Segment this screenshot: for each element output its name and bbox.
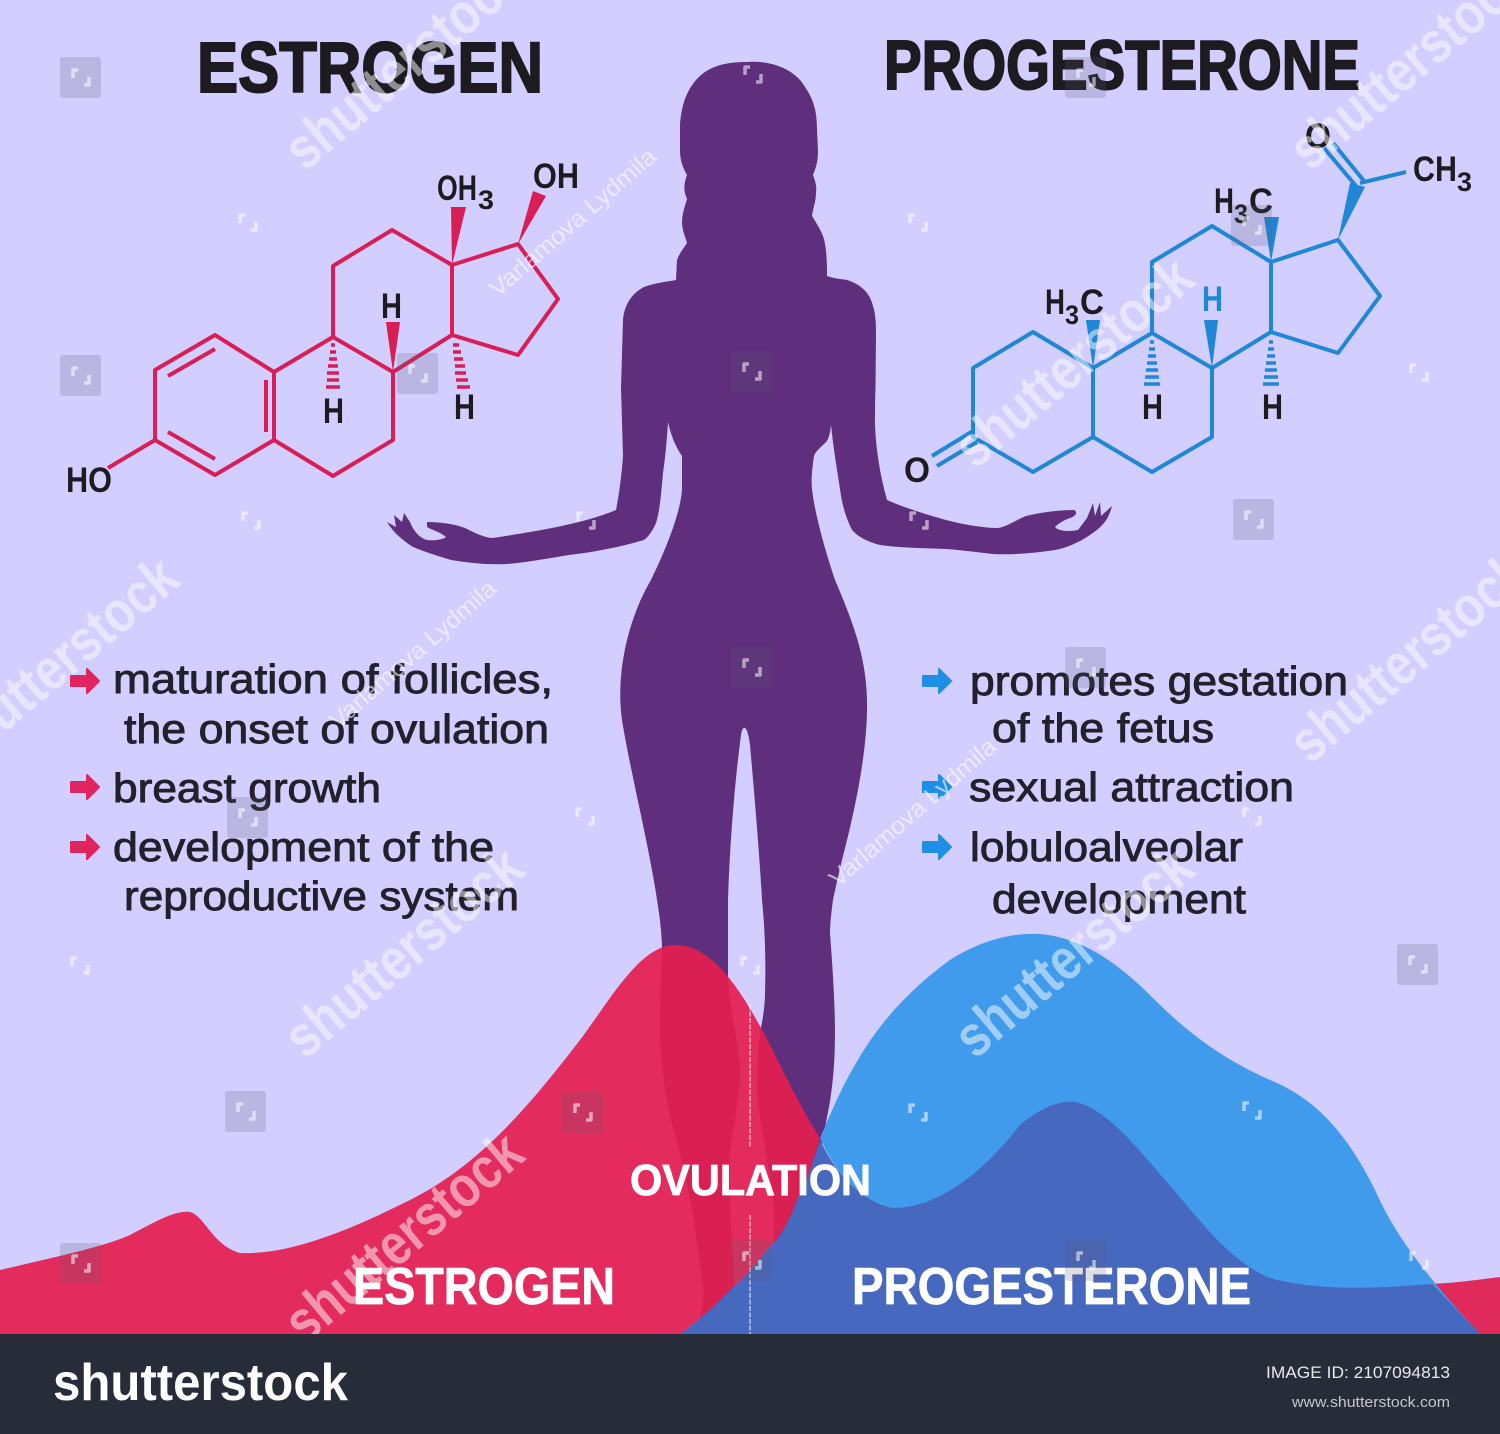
- molecule labels: progesterone: O: [1305, 117, 1331, 156]
- molecule labels: estrogen: H: [381, 287, 402, 326]
- list: progesterone effects: [923, 658, 1348, 922]
- curve: estrogen right tail: [1420, 1277, 1500, 1334]
- molecule labels: estrogen: OH: [437, 169, 477, 208]
- molecule labels: progesterone: [904, 117, 1472, 490]
- footer image id: IMAGE ID: 2107094813: [1266, 1363, 1450, 1382]
- hashed bonds: [1144, 342, 1279, 384]
- molecule labels: progesterone: H: [1202, 280, 1223, 319]
- molecule: estrogen: [108, 191, 558, 476]
- curve: overlap: [680, 1102, 1480, 1334]
- footer bar: [0, 1334, 1500, 1434]
- list: estrogen effects: the onset of ovulation: [124, 706, 549, 752]
- watermarks: Varlamova Lydmila: [484, 143, 662, 303]
- molecule labels: progesterone: C: [1080, 283, 1104, 322]
- molecule labels: estrogen: H: [323, 392, 344, 431]
- watermarks: shutterstock: [942, 243, 1206, 480]
- list: progesterone effects: promotes gestation: [970, 658, 1348, 704]
- molecule labels: progesterone: H: [1142, 388, 1163, 427]
- curve: progesterone: [820, 934, 1480, 1334]
- molecule labels: estrogen: 3: [478, 185, 494, 215]
- list: progesterone effects: lobuloalveolar: [970, 824, 1243, 870]
- watermarks: shutterstock: [942, 833, 1206, 1070]
- watermarks: shutterstock: [272, 1118, 536, 1355]
- molecule labels: progesterone: O: [904, 451, 930, 490]
- title: progesterone: PROGESTERONE: [884, 26, 1360, 104]
- arrow icons: blue: [923, 669, 951, 859]
- footer logo: shutterstock: [53, 1354, 348, 1412]
- list: estrogen effects: reproductive system: [124, 873, 519, 919]
- molecule labels: progesterone: H: [1214, 182, 1234, 221]
- molecule labels: progesterone: 3: [1457, 167, 1472, 197]
- list: estrogen effects: development of the: [113, 824, 494, 870]
- list: estrogen effects: maturation of follicles,: [113, 656, 553, 702]
- list: estrogen effects: breast growth: [113, 765, 381, 811]
- molecule labels: estrogen: OH: [533, 157, 579, 196]
- marker: ovulation line: [749, 1005, 751, 1334]
- curve: estrogen: [0, 945, 820, 1334]
- list: estrogen effects: [71, 656, 553, 919]
- watermarks: Varlamova Lydmila: [824, 733, 1002, 893]
- label: ovulation: OVULATION: [630, 1156, 871, 1205]
- footer url: www.shutterstock.com: [1291, 1394, 1450, 1411]
- watermarks: Varlamova Lydmila: [324, 575, 502, 735]
- label: estrogen: ESTROGEN: [353, 1258, 615, 1316]
- molecule labels: progesterone: 3: [1234, 199, 1248, 229]
- list: progesterone effects: development: [992, 876, 1247, 922]
- molecule labels: estrogen: H: [454, 388, 475, 427]
- wedge bonds: [386, 191, 546, 372]
- list: progesterone effects: sexual attraction: [969, 764, 1294, 810]
- molecule labels: progesterone: C: [1249, 182, 1273, 221]
- label: progesterone: PROGESTERONE: [852, 1258, 1251, 1316]
- title: estrogen: ESTROGEN: [197, 29, 543, 108]
- molecule labels: progesterone: H: [1262, 388, 1283, 427]
- wedge bonds: [1086, 183, 1365, 368]
- molecule labels: estrogen: [66, 157, 579, 500]
- arrow icons: red: [71, 669, 99, 859]
- hashed bonds: [326, 345, 470, 387]
- silhouette: woman: [387, 62, 1112, 1334]
- molecule labels: progesterone: H: [1045, 283, 1065, 322]
- list: progesterone effects: of the fetus: [992, 705, 1214, 751]
- chart: hormone curves: [0, 934, 1500, 1334]
- molecule: progesterone: [932, 143, 1406, 472]
- molecule labels: progesterone: CH: [1413, 150, 1457, 189]
- molecule labels: estrogen: HO: [66, 461, 112, 500]
- molecule labels: progesterone: 3: [1065, 300, 1079, 330]
- watermarks: shutterstock: [272, 833, 536, 1070]
